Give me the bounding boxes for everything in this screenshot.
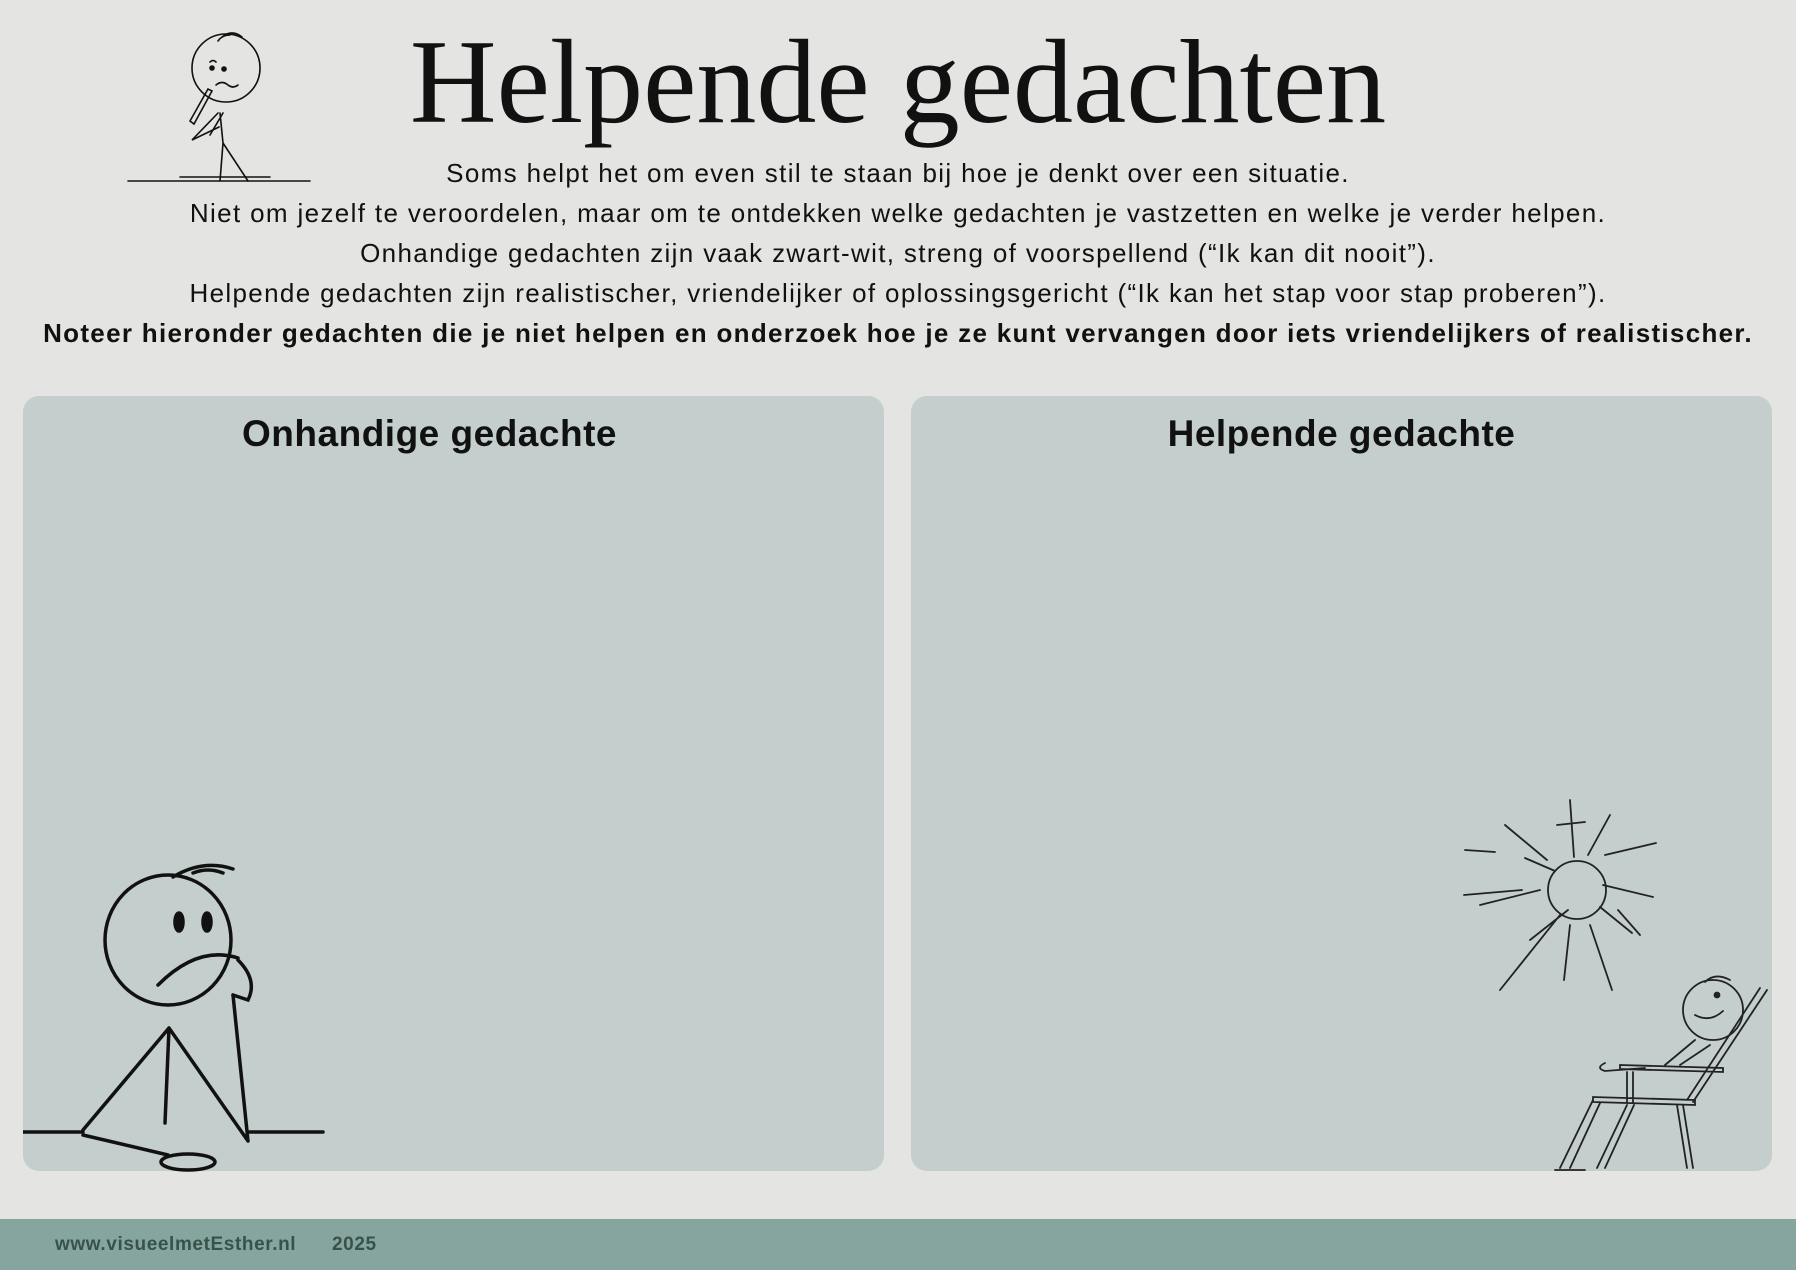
icon: sun — [1463, 799, 1657, 991]
heading: onhandige: Onhandige gedachte — [242, 413, 617, 454]
intro text: Soms helpt het om even stil te staan bij hoe je denkt over een situatie. — [446, 158, 1350, 188]
footer: 2025 — [332, 1234, 377, 1255]
footer: www.visueelmetEsther.nl — [55, 1234, 296, 1255]
icon: thinking figure top left — [127, 32, 311, 182]
intro text: Noteer hieronder gedachten die je niet helpen en onderzoek hoe je ze kunt vervangen door iets vriendelijkers of realistischer. — [43, 318, 1753, 348]
intro text: Onhandige gedachten zijn vaak zwart-wit, streng of voorspellend (“Ik kan dit nooit”). — [360, 238, 1436, 268]
intro text — [43, 158, 1753, 348]
panel: helpende gedachte — [911, 396, 1772, 1171]
icon: sad thinking figure — [23, 864, 325, 1172]
title: Helpende gedachten — [410, 15, 1386, 148]
footer — [0, 1219, 1796, 1270]
intro text: Helpende gedachten zijn realistischer, vriendelijker of oplossingsgericht (“Ik kan het stap voor stap proberen”). — [189, 278, 1607, 308]
intro text: Niet om jezelf te veroordelen, maar om te ontdekken welke gedachten je vastzetten en welke je verder helpen. — [190, 198, 1606, 228]
icon: relaxing figure in chair — [1554, 976, 1768, 1171]
panel: onhandige gedachte — [23, 396, 884, 1171]
heading: helpende: Helpende gedachte — [1168, 413, 1515, 454]
